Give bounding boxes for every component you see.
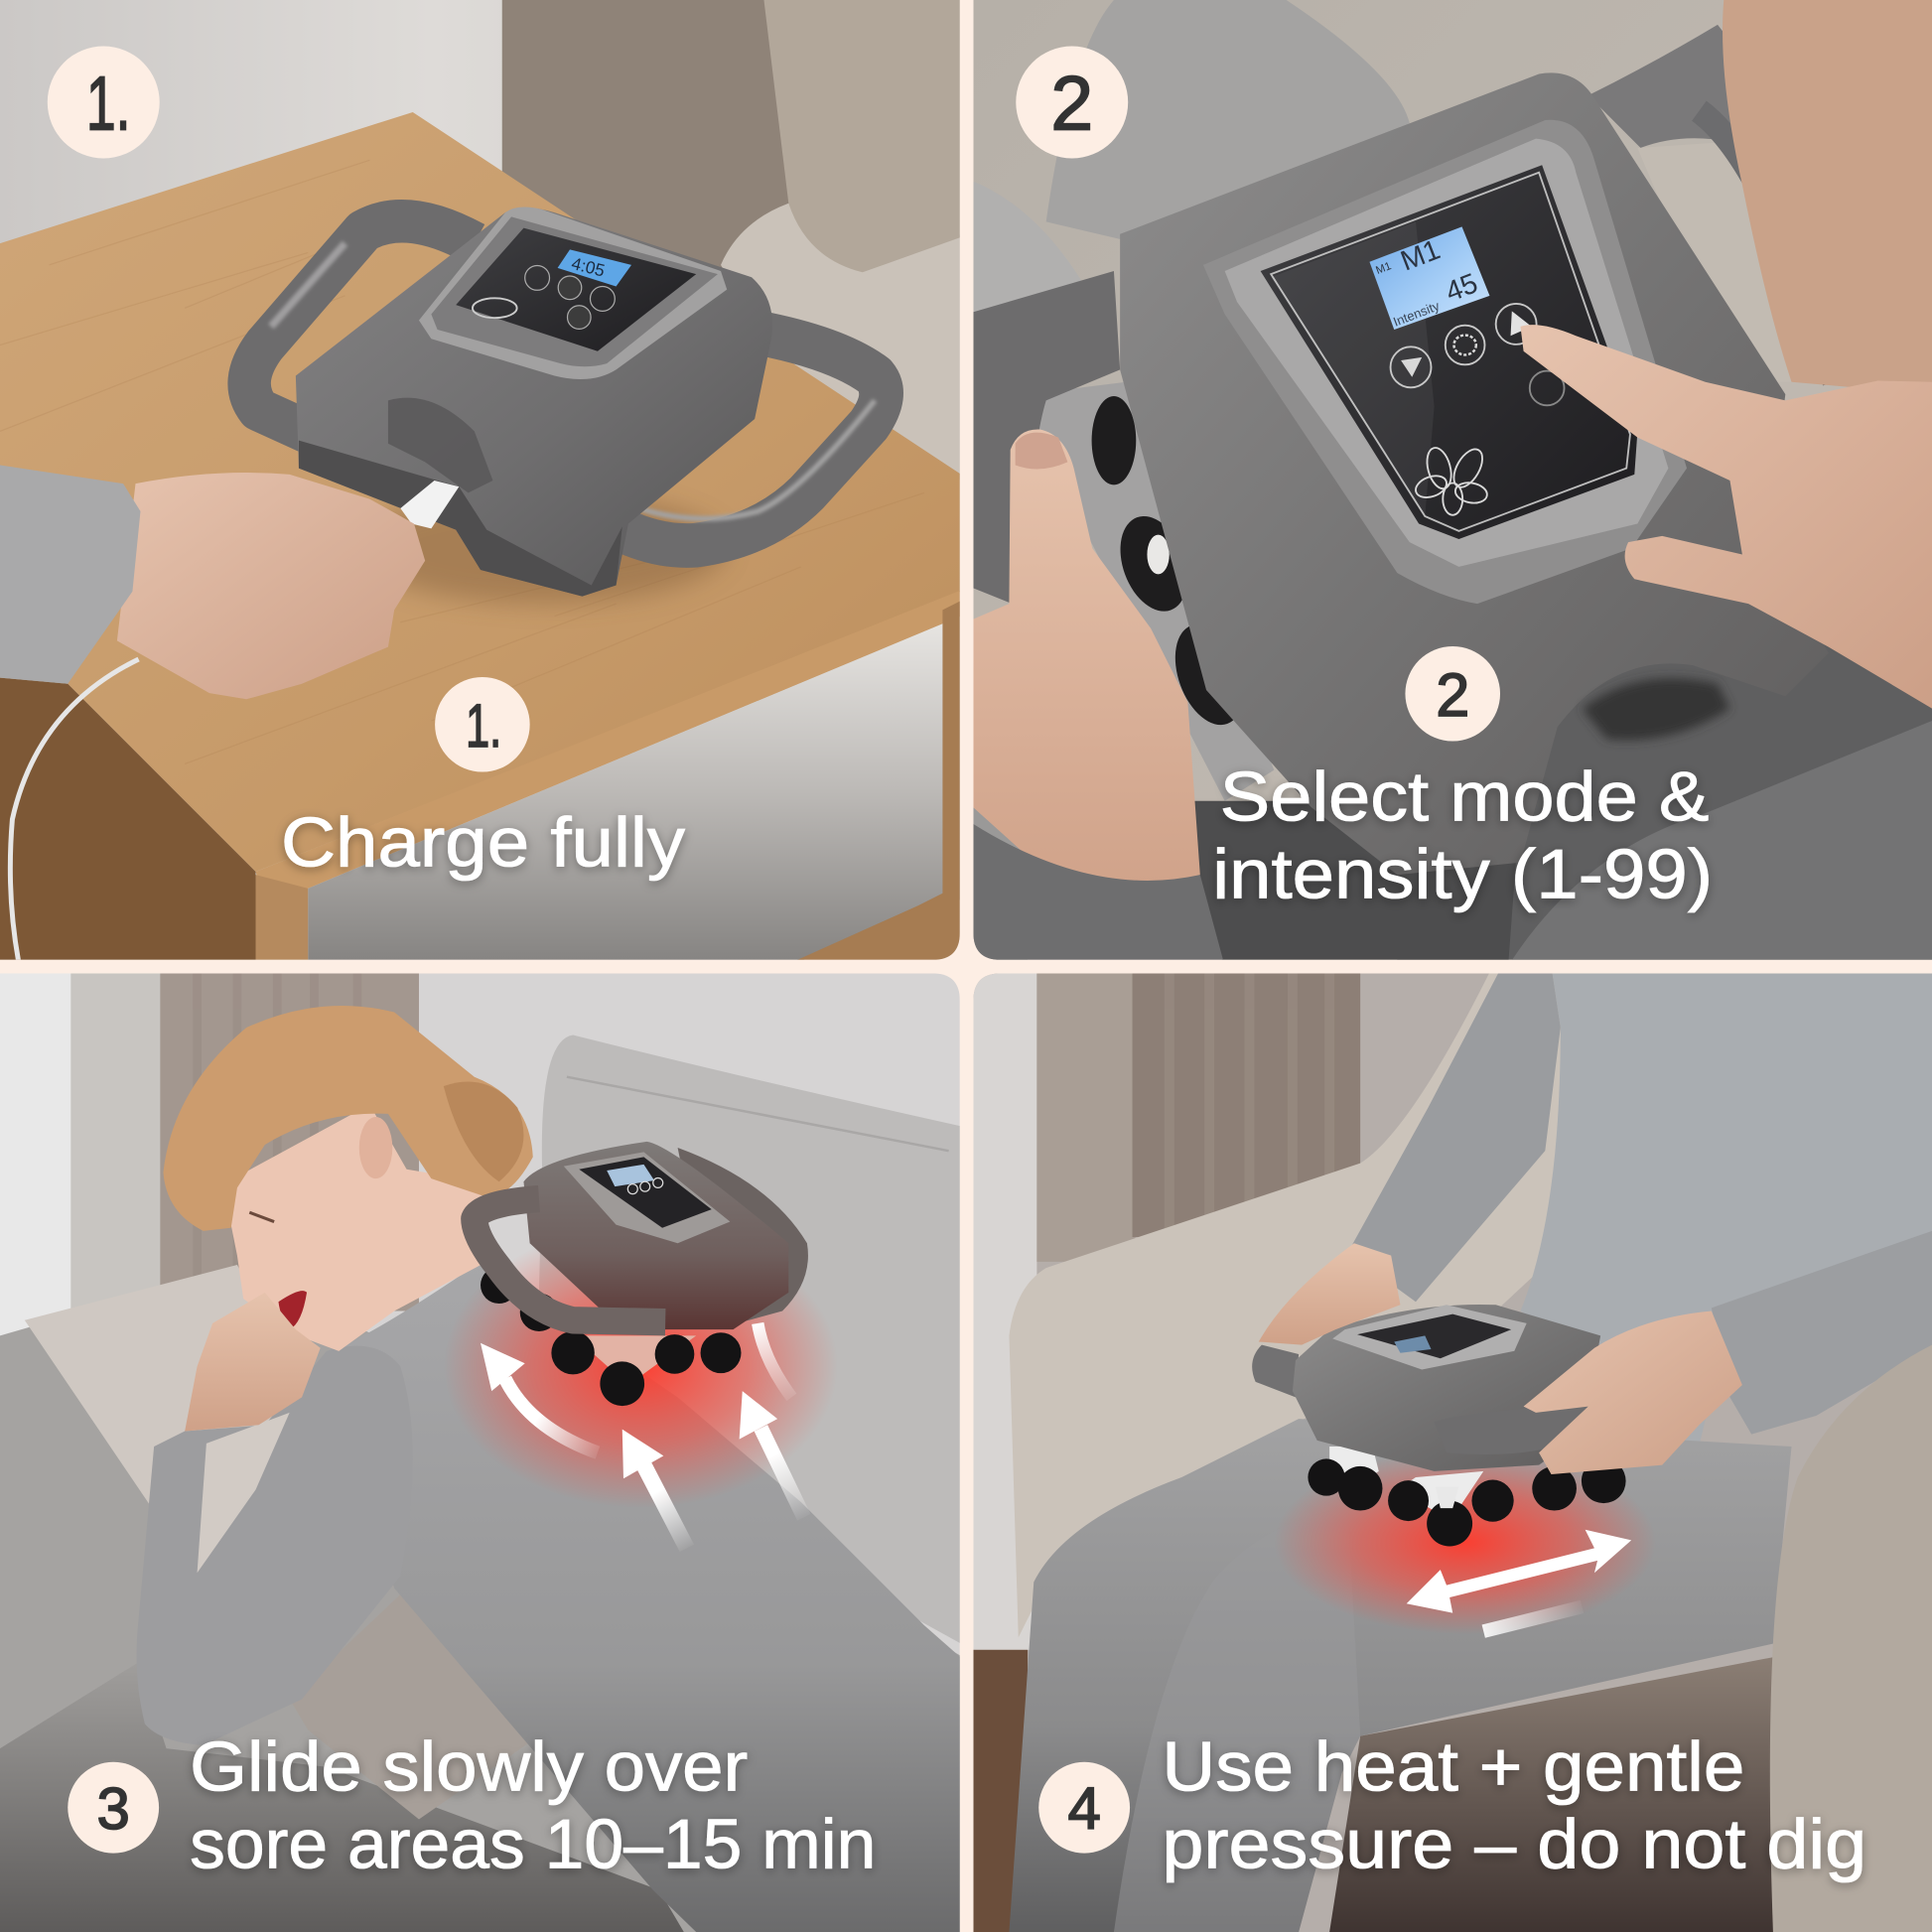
LCD display with mode and intensity: M1 xyxy=(1396,233,1445,278)
LCD display with mode and intensity xyxy=(1369,226,1489,330)
scene: armchair room xyxy=(966,966,1932,1932)
seated person in grey clothes xyxy=(1009,966,1932,1932)
badge: caption number 2 xyxy=(1405,646,1500,742)
arrow: back and forth movement xyxy=(1407,1530,1631,1631)
panel: step 1 charge fully xyxy=(0,0,961,961)
hand plugging in USB cable xyxy=(0,466,459,699)
device: massager on thigh xyxy=(1252,1305,1626,1547)
caption: select mode and intensity: intensity (1-99) xyxy=(1212,835,1713,913)
icon: flower logo xyxy=(1413,445,1488,515)
panel: step 4 use heat and gentle pressure xyxy=(966,966,1932,1932)
control buttons xyxy=(1391,304,1565,405)
caption: glide slowly xyxy=(189,1739,876,1874)
device: close-up of massager xyxy=(966,25,1854,875)
caption: use heat and gentle pressure xyxy=(1162,1726,1866,1882)
badge: caption number 1: 1. xyxy=(466,692,501,759)
caption: use heat and gentle pressure: Use heat + gentle xyxy=(1162,1726,1744,1805)
badge: number 3: 3 xyxy=(97,1775,130,1842)
badge: number 4 xyxy=(1038,1762,1130,1854)
badge: caption number 2: 2 xyxy=(1436,661,1469,729)
arrows: upward glide directions xyxy=(481,1323,804,1548)
caption: glide slowly: sore areas 10–15 min xyxy=(190,1804,876,1882)
hands holding device xyxy=(1259,1243,1742,1474)
caption: select mode and intensity: Select mode & xyxy=(1220,758,1709,836)
badge: top number 2 xyxy=(1016,47,1128,158)
panel: step 2 select mode and intensity xyxy=(966,0,1932,966)
caption: charge fully: Charge fully xyxy=(281,802,686,881)
hands and head xyxy=(966,0,1932,966)
device: massager on back xyxy=(475,1142,808,1406)
caption: select mode and intensity xyxy=(1212,758,1713,913)
heat glow on upper back xyxy=(457,1253,828,1499)
badge: caption number 1 xyxy=(435,677,530,772)
LCD display with mode and intensity: 45 xyxy=(1442,267,1482,309)
caption: use heat and gentle pressure: pressure – do not dig xyxy=(1162,1804,1866,1882)
heat glow on thigh xyxy=(1287,1461,1643,1628)
scene: lap background xyxy=(966,0,1932,966)
LCD display with mode and intensity: M1 xyxy=(1374,260,1393,277)
panel: step 3 glide over sore areas xyxy=(0,966,966,1932)
badge: top number 1: 1. xyxy=(86,61,131,146)
badge: top number 1 xyxy=(48,47,160,158)
caption: glide slowly: Glide slowly over xyxy=(190,1726,748,1805)
device: massager on table: 4:05 xyxy=(570,253,607,281)
LCD display with mode and intensity: Intensity xyxy=(1391,298,1442,330)
scene: living room sofa xyxy=(0,966,966,1932)
cable xyxy=(10,659,139,961)
badge: top number 2: 2 xyxy=(1050,61,1093,146)
scene: side table and sofa xyxy=(0,0,961,961)
woman resting on sofa xyxy=(137,1006,966,1932)
device: massager on table xyxy=(249,207,882,604)
badge: number 3 xyxy=(68,1762,159,1854)
badge: number 4: 4 xyxy=(1068,1775,1101,1842)
